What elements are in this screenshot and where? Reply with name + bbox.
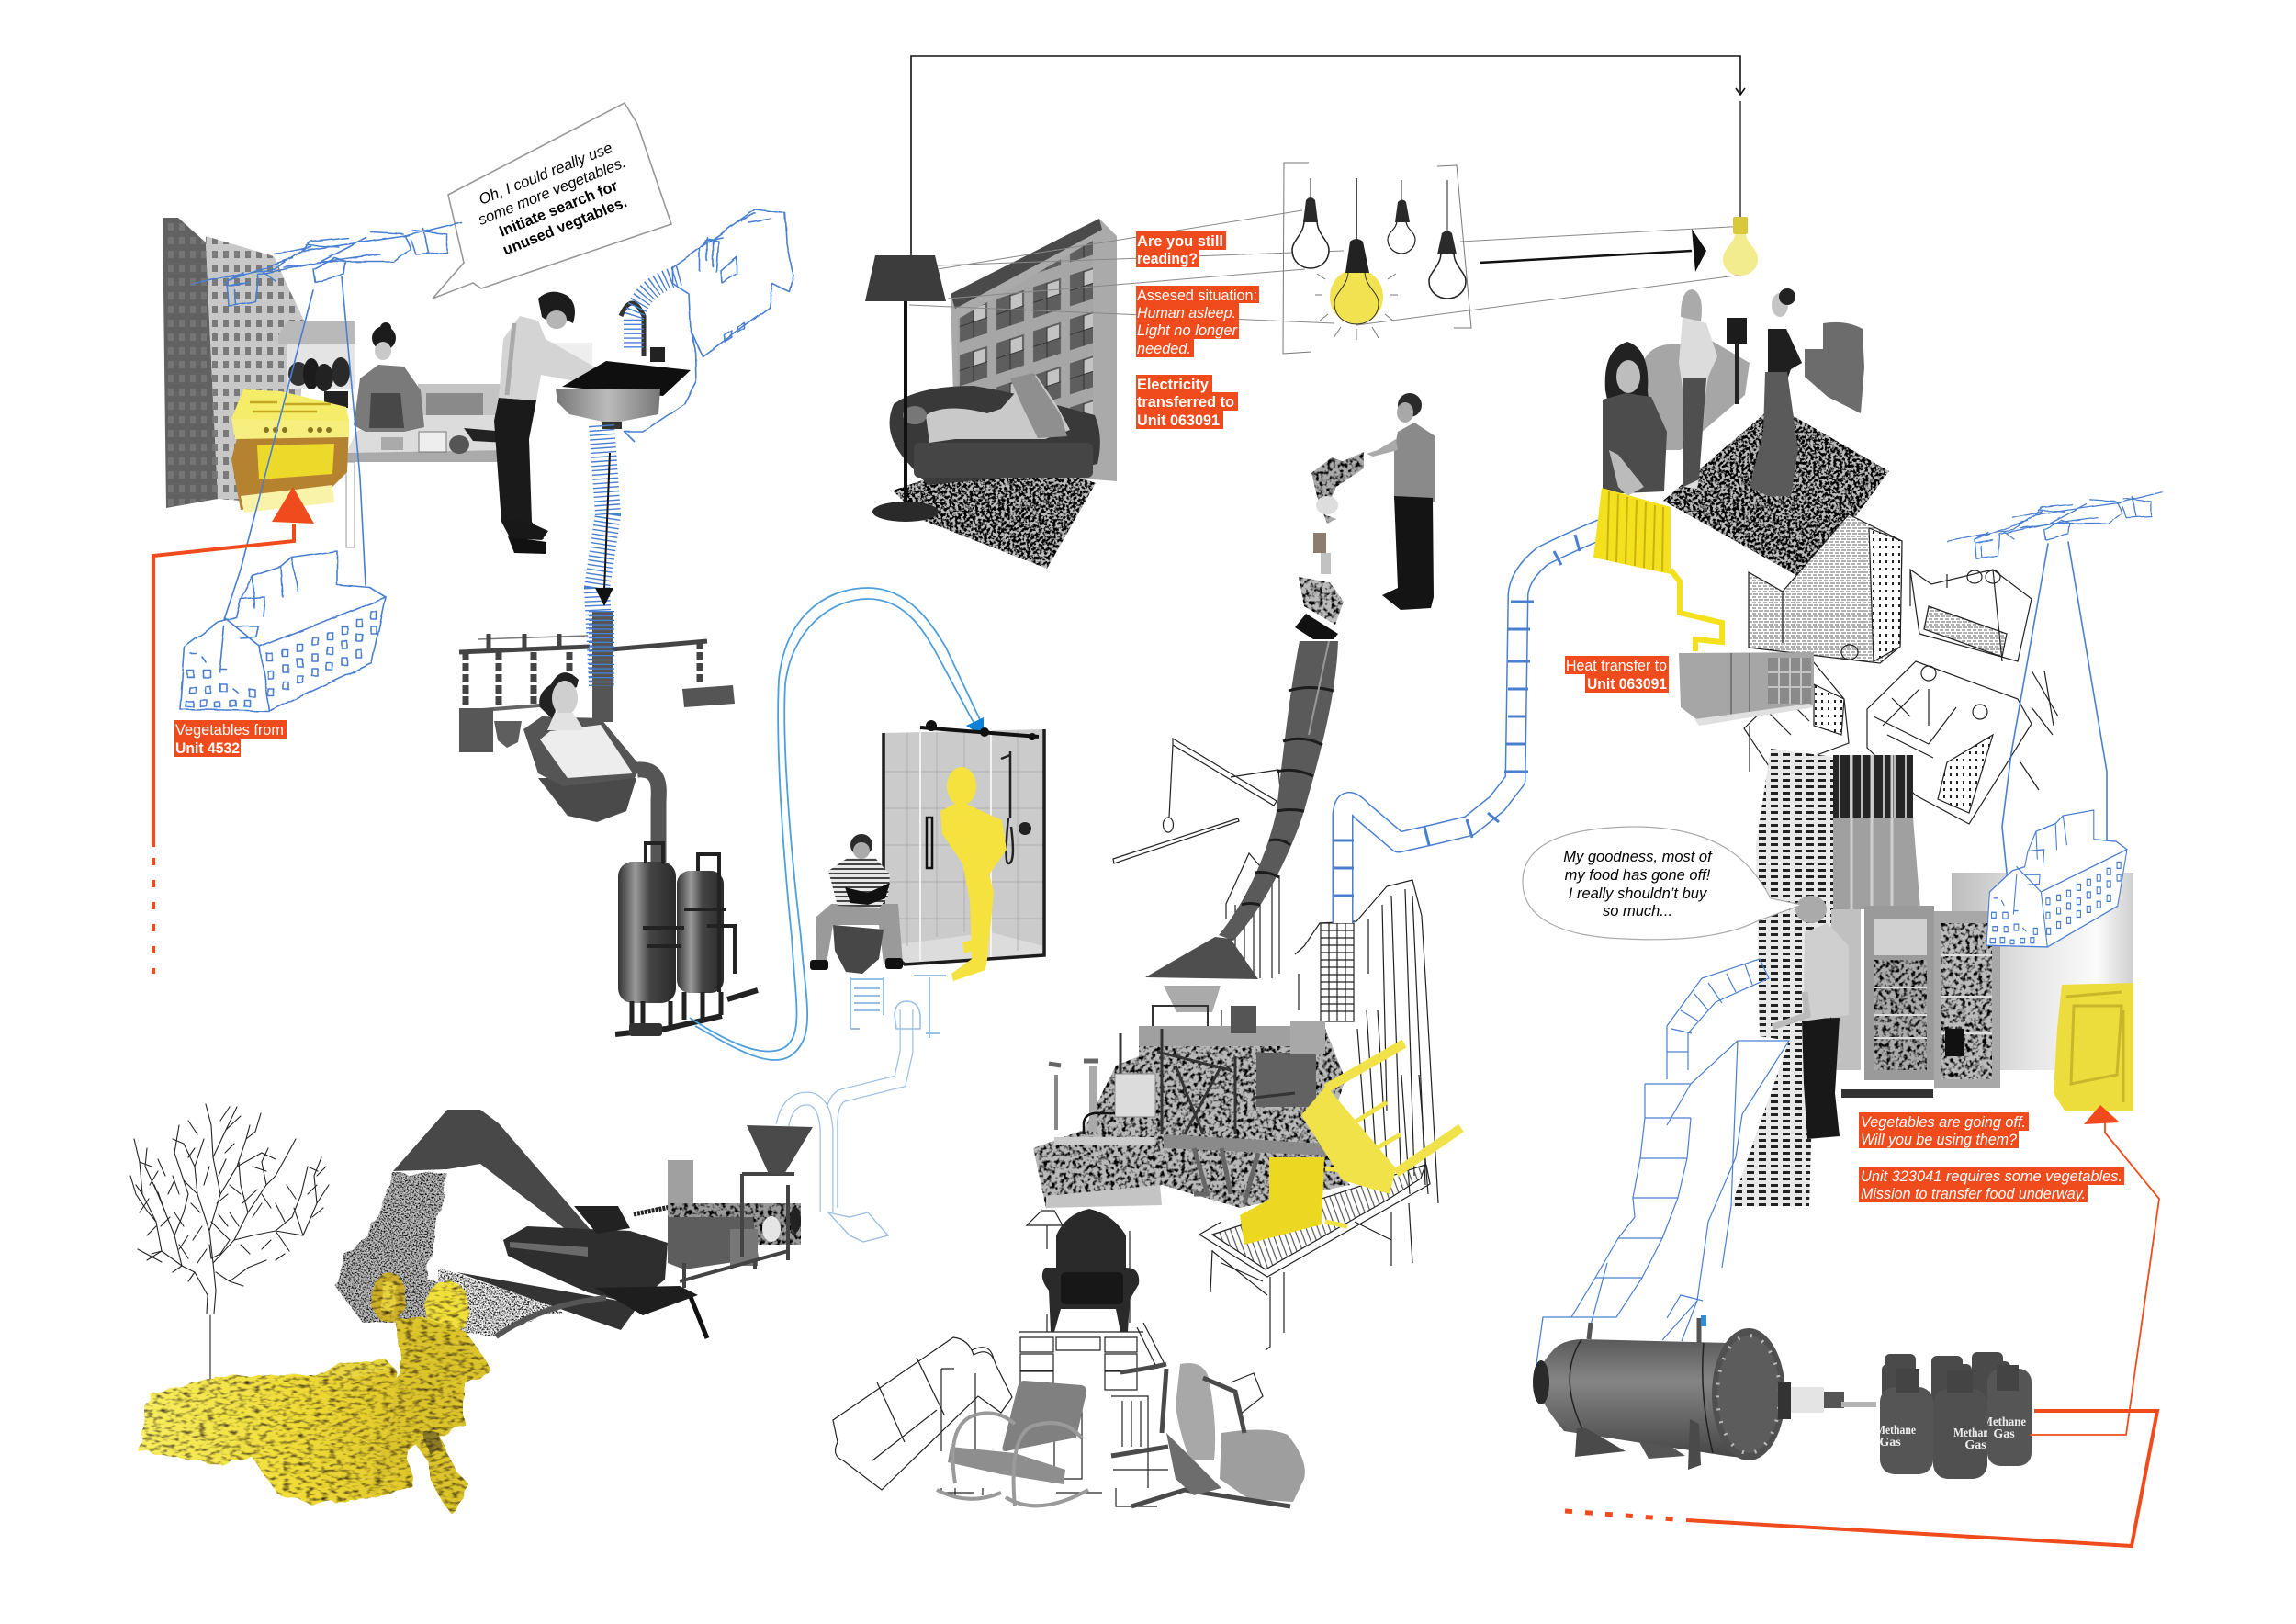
falling trash xyxy=(1295,452,1364,639)
yellow stove right xyxy=(2054,983,2133,1111)
rug xyxy=(893,450,1096,569)
rocking chair xyxy=(937,1381,1088,1506)
throne armchair xyxy=(1042,1209,1139,1332)
combine body xyxy=(456,1206,707,1338)
plumbing manifold xyxy=(459,634,735,752)
label: vegetables from unit 4532 xyxy=(174,720,287,757)
arrow: red arrow into oven xyxy=(153,487,314,974)
sketch: furniture line drawing xyxy=(833,1211,1263,1506)
living room scene xyxy=(1603,288,1889,581)
sketch: right tether lines xyxy=(2002,542,2107,882)
yellow chairs xyxy=(1240,1043,1461,1245)
speech bubble: goodness xyxy=(1523,827,1802,940)
stove: yellow oven xyxy=(231,389,349,513)
light bulb 2 lit yellow xyxy=(1315,178,1398,340)
labels: electricity transferred: transferred to xyxy=(1137,394,1234,411)
label: vegetables from unit 4532: Vegetables from xyxy=(175,722,284,739)
light bulb 1 xyxy=(1292,178,1329,268)
apartment with lamp and sleeping man xyxy=(865,56,1758,569)
labels: are you still reading: reading? xyxy=(1137,251,1198,267)
kitchen background right xyxy=(1952,873,2133,1070)
label: vegetables going off: Vegetables are going off. xyxy=(1861,1114,2026,1131)
cylinder centre xyxy=(1933,1370,1994,1479)
photo: city buildings xyxy=(163,218,304,508)
sketch: left blue apartment block xyxy=(180,551,386,711)
tree drawing xyxy=(130,1104,329,1396)
sofa with sleeping man xyxy=(890,373,1100,485)
shower and toilet group xyxy=(782,720,1044,1242)
light blue double line curve xyxy=(690,588,983,1060)
back cylinders xyxy=(1882,1352,2010,1438)
chute for trash xyxy=(1145,641,1338,979)
shower cabin xyxy=(884,720,1044,964)
cylinder right: Gas xyxy=(1993,1427,2015,1441)
skyscraper tower xyxy=(1731,749,1920,1206)
person: woman standing left xyxy=(1679,289,1717,489)
rug big xyxy=(1663,405,1889,581)
person: yellow man in shower xyxy=(940,767,1007,981)
labels: electricity transferred: Unit 063091 xyxy=(1137,412,1220,429)
yellow field xyxy=(138,1362,413,1504)
cylinder left: Gas xyxy=(1879,1436,1901,1449)
photo: range hood and pans xyxy=(278,321,355,408)
armchair xyxy=(1805,322,1864,413)
labels: assessed situation: Light no longer xyxy=(1137,322,1238,339)
vertical drain pipe xyxy=(592,611,613,722)
label: heat transfer: Unit 063091 xyxy=(1587,676,1667,693)
speech bubble: goodness: I really shouldn’t buy xyxy=(1569,885,1708,902)
label: unit requires vegetables xyxy=(1859,1167,2124,1202)
sink with faucet xyxy=(556,303,691,429)
black line to remote lamp xyxy=(911,56,1745,255)
speech bubble: vegetables xyxy=(433,103,671,299)
sketch: right blue apartment block xyxy=(1986,810,2127,947)
speech bubble: goodness: My goodness, most of xyxy=(1563,849,1714,865)
labels: assessed situation xyxy=(1136,286,1259,357)
bulbs bracket xyxy=(1283,163,1471,354)
radiator yellow xyxy=(1593,488,1671,574)
sketch: conveyor table xyxy=(1199,1165,1430,1350)
light bulb 4 xyxy=(1429,180,1466,299)
speech bubble: vegetables: unused vegtables. xyxy=(501,194,629,259)
cylinder right xyxy=(1982,1365,2032,1466)
person: woman foreground xyxy=(1603,342,1667,496)
person: man at the sink xyxy=(494,292,606,554)
arrow: black right arrow xyxy=(1480,229,1706,272)
large gas tank xyxy=(1533,1315,1876,1470)
sketch: black city drawing xyxy=(1744,514,2058,824)
combine spout xyxy=(393,1110,597,1243)
yellow farmer xyxy=(316,1271,490,1513)
lamp small xyxy=(1727,318,1747,404)
water filter tanks xyxy=(615,843,758,1036)
fridge xyxy=(1831,906,2000,1098)
labels: are you still reading xyxy=(1136,231,1226,267)
sofa in living room xyxy=(1644,340,1750,450)
sketch: black lever xyxy=(1113,739,1281,863)
yellow pipe xyxy=(1671,570,1722,651)
label: vegetables from unit 4532: Unit 4532 xyxy=(175,740,240,757)
speech bubble: goodness: my food has gone off! xyxy=(1565,867,1711,884)
AC unit xyxy=(1679,652,1814,726)
sketch: vacuum hose machine xyxy=(625,209,793,441)
methane gas cylinders xyxy=(1875,1352,2032,1479)
extruder machine with funnel xyxy=(668,1125,813,1288)
cylinder centre: Gas xyxy=(1964,1438,1986,1452)
speech bubble: vegetables: Initiate search for xyxy=(497,177,621,240)
bath and water treatment group xyxy=(459,588,984,1060)
brick building xyxy=(951,219,1117,481)
person: man reading on toilet xyxy=(810,834,903,974)
sketch: flexible hoses xyxy=(597,276,680,686)
sketch: left drone xyxy=(192,222,461,306)
floor lamp xyxy=(865,255,946,522)
pipe tub to tank xyxy=(637,770,658,868)
combine harvester pouring grain xyxy=(335,1110,707,1338)
arrow: red triangle xyxy=(2084,1105,2120,1124)
label: vegetables going off xyxy=(1859,1112,2029,1148)
sketch: drone tether lines xyxy=(218,276,366,668)
speech bubble: goodness: so much... xyxy=(1603,903,1672,919)
photo: counter with food xyxy=(346,384,506,547)
drawing: left building and drone kitchen scene xyxy=(153,103,793,974)
labels: assessed situation: Human asleep. xyxy=(1137,305,1236,321)
thin lines linking lamps and bulbs xyxy=(909,210,1747,325)
arrow: black down arrow on hose xyxy=(595,453,613,606)
labels: assessed situation: Assesed situation: xyxy=(1137,288,1257,304)
yellow bulb at end xyxy=(1723,101,1758,276)
bathtub with woman xyxy=(523,672,641,822)
light bulb 3 xyxy=(1388,180,1415,254)
yellow chair darker xyxy=(1240,1157,1348,1245)
arrow: blue triangle xyxy=(966,717,984,737)
sketch: black line skyscrapers xyxy=(1221,853,1438,1203)
speech bubble: vegetables: some more vegetables. xyxy=(476,154,628,229)
labels: are you still reading: Are you still xyxy=(1137,233,1223,250)
person: cook xyxy=(354,322,424,432)
grain stream xyxy=(335,1173,496,1336)
label: heat transfer: Heat transfer to xyxy=(1566,658,1667,674)
antique side chair xyxy=(1111,1363,1305,1506)
label: heat transfer xyxy=(1565,656,1669,693)
sketch: right drone xyxy=(1947,492,2162,558)
factory machine xyxy=(1033,986,1350,1208)
person: gray man dropping trash xyxy=(1367,393,1435,610)
label: unit requires vegetables: Unit 323041 requires some vegetables. xyxy=(1861,1168,2122,1185)
sketch: blue wireframe ramp xyxy=(1536,959,1789,1370)
speech bubble: vegetables: Oh, I could really use xyxy=(477,140,614,209)
sketch: pale blue pipes xyxy=(782,976,946,1242)
person: woman standing right xyxy=(1750,288,1802,496)
labels: assessed situation: needed. xyxy=(1137,341,1191,357)
sketch: blue thick pipe xyxy=(1333,529,1602,923)
labels: electricity transferred xyxy=(1136,375,1238,429)
label: unit requires vegetables: Mission to transfer food underway. xyxy=(1861,1186,2086,1202)
labels: electricity transferred: Electricity xyxy=(1137,377,1210,393)
label: vegetables going off: Will you be using them? xyxy=(1861,1132,2018,1148)
cylinder left xyxy=(1875,1369,1933,1474)
person: woman at fridge xyxy=(1773,896,1849,1139)
red lines and arrow right xyxy=(1565,1122,2159,1546)
yellow chair tilted xyxy=(1301,1043,1461,1194)
